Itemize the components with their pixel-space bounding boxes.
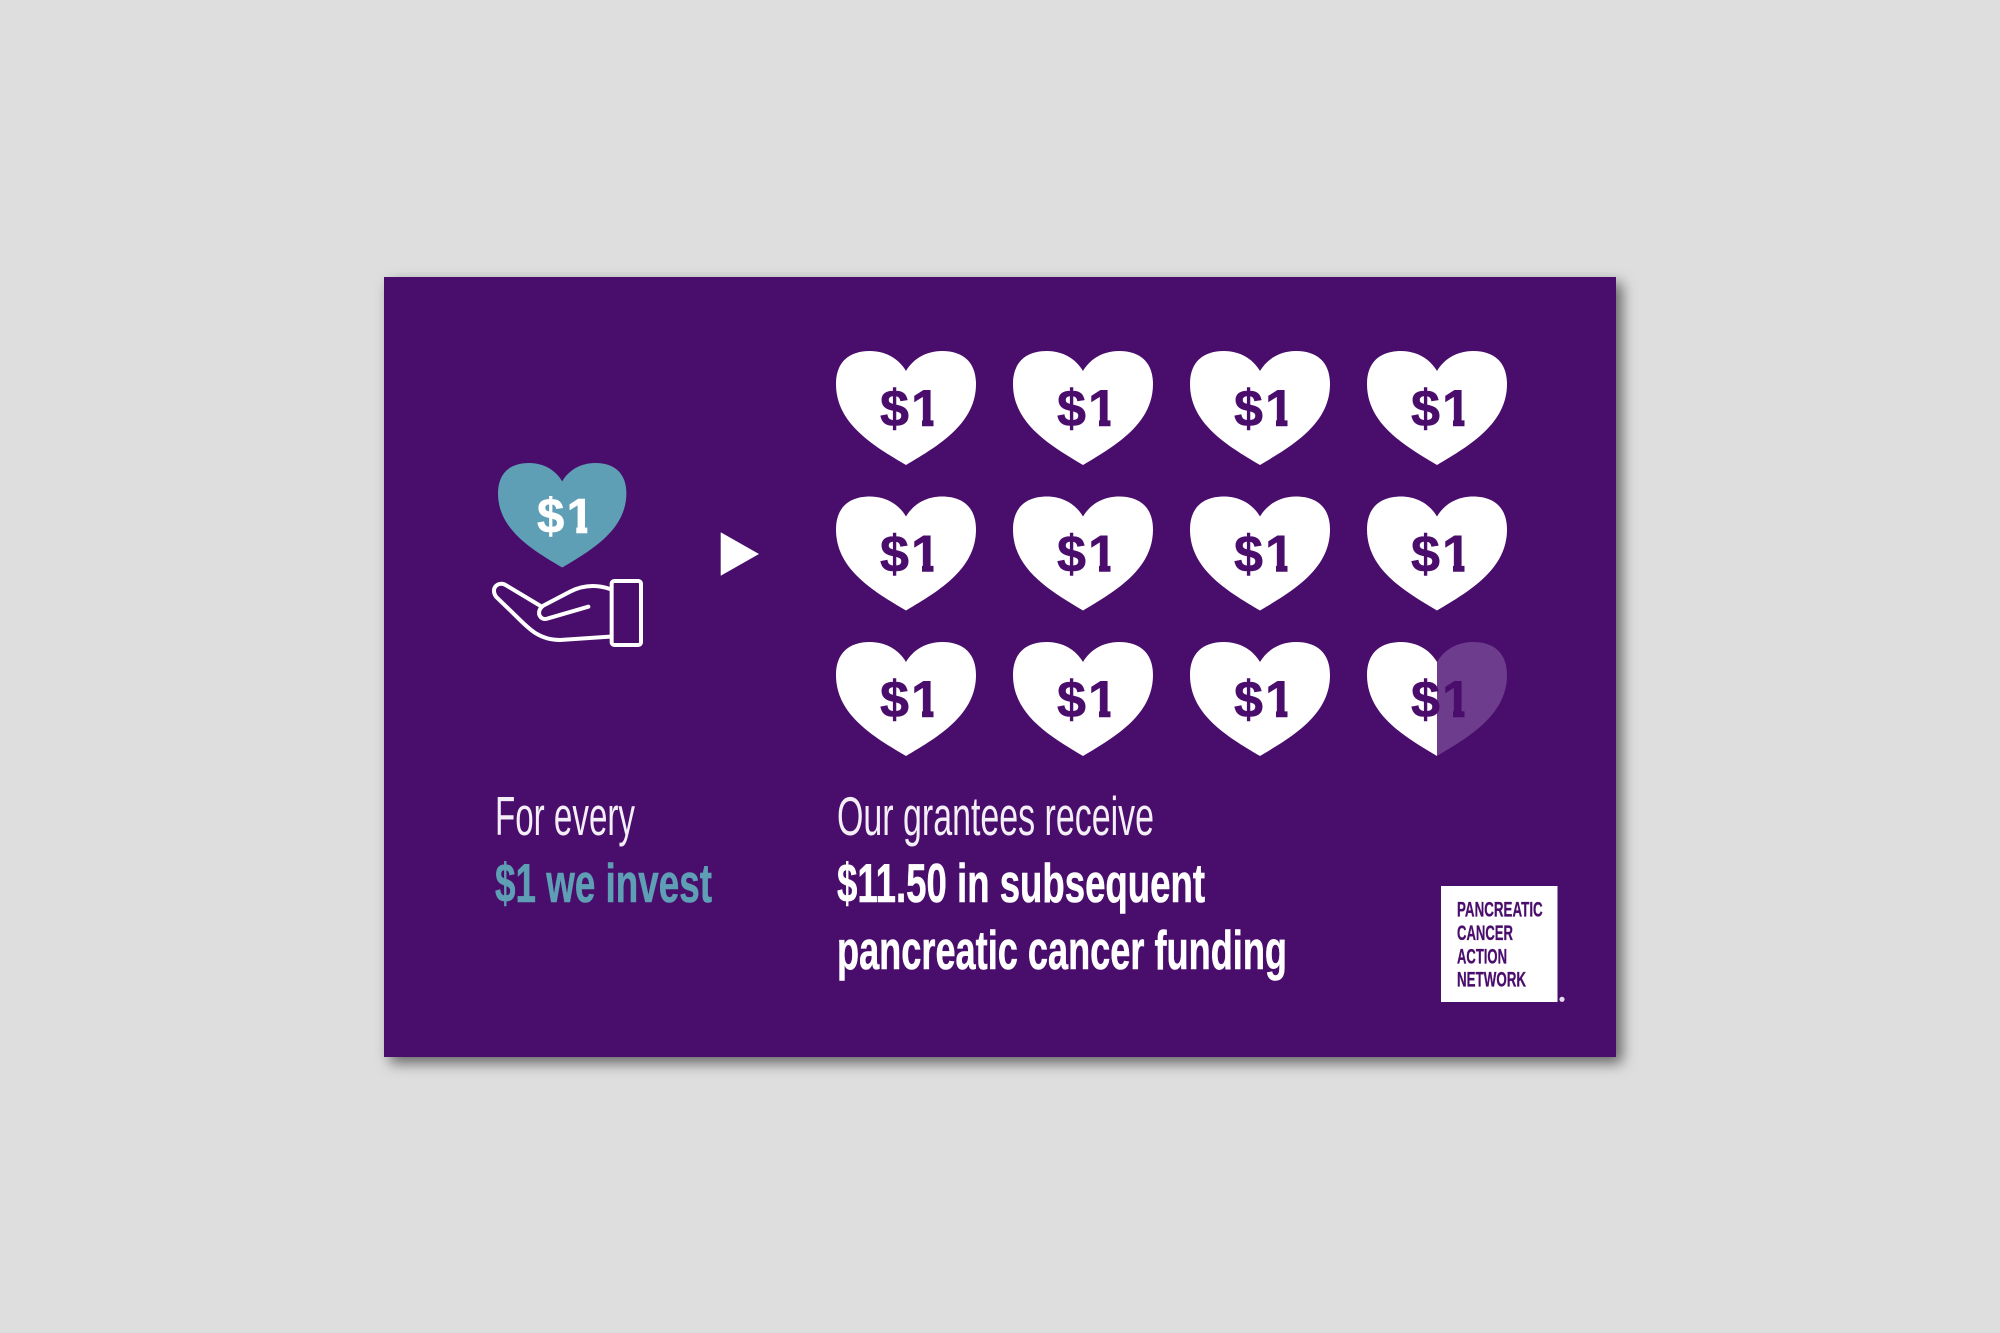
heart grid: twelve dollar hearts — [836, 351, 1507, 756]
icon: teal heart with one dollar: $1 — [537, 490, 594, 544]
heart 2: $1 — [1057, 380, 1117, 438]
panel: purple card — [384, 277, 1616, 1057]
logo: pancreatic cancer action network: ACTION — [1457, 945, 1507, 968]
logo: pancreatic cancer action network: PANCREATIC — [1457, 899, 1543, 922]
heart 8 — [1367, 496, 1507, 610]
icon: teal heart with one dollar — [498, 463, 626, 568]
logo: pancreatic cancer action network: CANCER — [1457, 922, 1513, 945]
heart 3 — [1190, 351, 1330, 465]
heart 10: $1 — [1057, 671, 1117, 729]
logo: pancreatic cancer action network — [1441, 886, 1565, 1002]
heart 3: $1 — [1234, 380, 1294, 438]
heart 4: $1 — [1411, 380, 1471, 438]
heart 12: half filled: $1 — [1411, 671, 1471, 729]
heart 10 — [1013, 642, 1153, 756]
text: our grantees receive: Our grantees receive — [837, 785, 1154, 847]
text: funding line: pancreatic cancer funding — [837, 919, 1287, 981]
heart 6 — [1013, 496, 1153, 610]
logo: pancreatic cancer action network: NETWORK — [1457, 969, 1526, 992]
heart 2 — [1013, 351, 1153, 465]
heart 1: $1 — [880, 380, 940, 438]
icon: open hand — [494, 581, 641, 645]
heart 8: $1 — [1411, 526, 1471, 584]
infographic canvas — [380, 273, 1632, 1073]
text: subsequent amount: $11.50 in subsequent — [837, 852, 1205, 914]
heart 9 — [836, 642, 976, 756]
heart 5: $1 — [880, 526, 940, 584]
heart 6: $1 — [1057, 526, 1117, 584]
heart 7: $1 — [1234, 526, 1294, 584]
heart 5 — [836, 496, 976, 610]
text: for every: For every — [495, 785, 635, 847]
heart 11: $1 — [1234, 671, 1294, 729]
heart 4 — [1367, 351, 1507, 465]
heart 1 — [836, 351, 976, 465]
heart 12: half filled — [1367, 642, 1507, 756]
text: one dollar we invest: $1 we invest — [495, 852, 712, 914]
heart 9: $1 — [880, 671, 940, 729]
heart 7 — [1190, 496, 1330, 610]
arrow: pointing to grantee hearts — [721, 532, 759, 576]
heart 11 — [1190, 642, 1330, 756]
